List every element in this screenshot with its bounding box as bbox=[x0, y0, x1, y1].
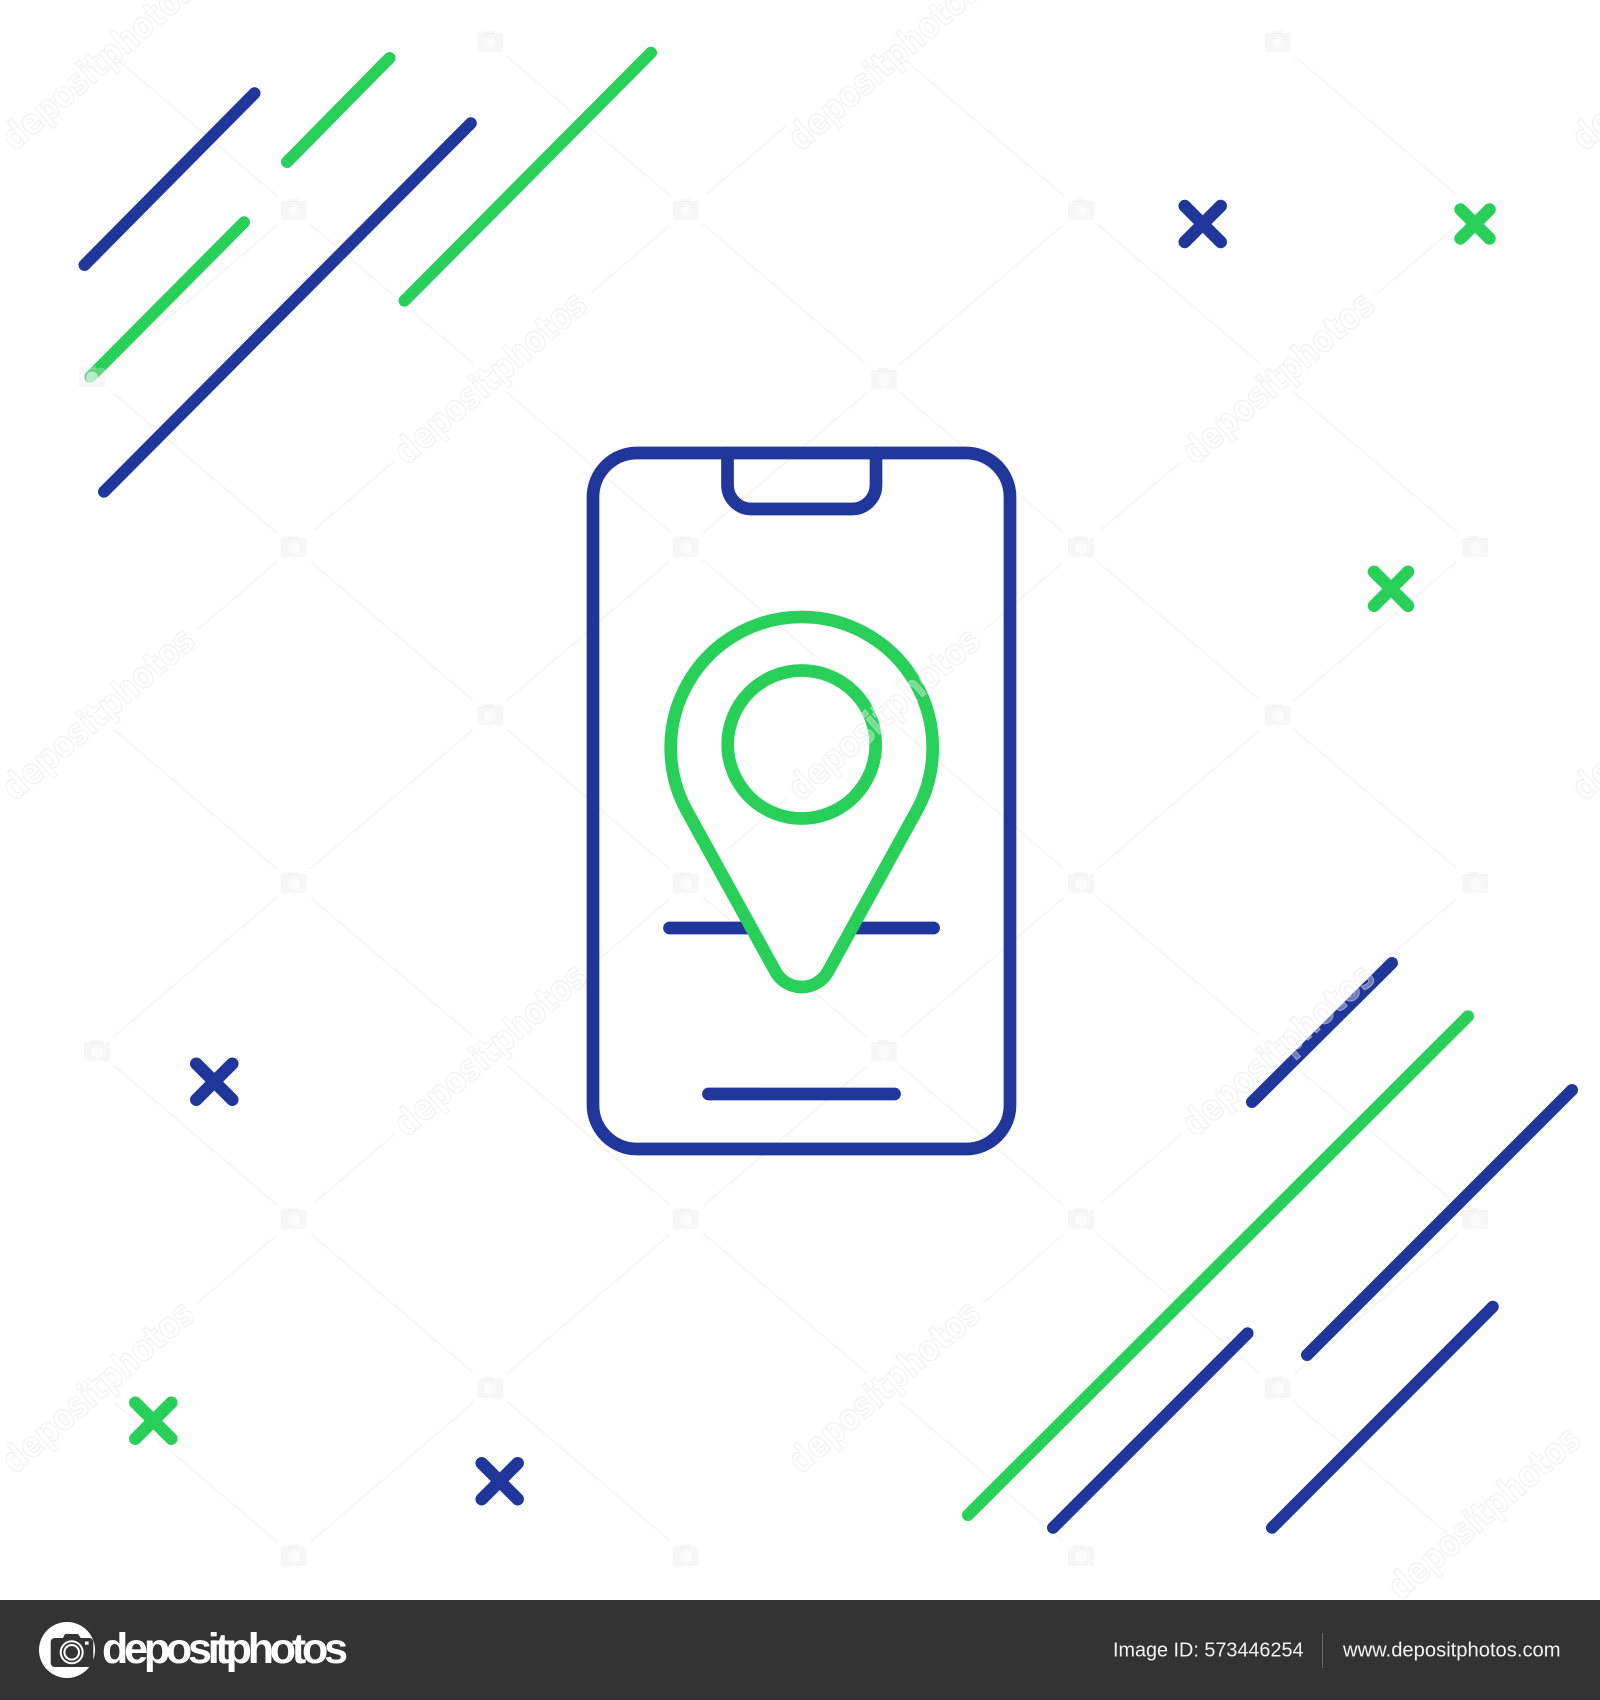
icon: smartphone with location pin bbox=[593, 453, 1010, 1149]
image id: Image ID: 573446254 bbox=[1113, 1640, 1304, 1662]
phone notch bbox=[728, 453, 876, 509]
faint watermark lattice lines bbox=[97, 42, 1475, 1556]
location pin inner circle bbox=[728, 670, 876, 818]
watermark text repeated: depositphotos bbox=[386, 284, 595, 473]
watermark text repeated: depositphotos bbox=[0, 620, 203, 809]
watermark text repeated: depositphotos bbox=[0, 1293, 203, 1482]
footer separator bbox=[1322, 1633, 1323, 1668]
icon: green cross right bbox=[1374, 572, 1408, 606]
logo wordmark: depositphotos bbox=[102, 1625, 348, 1673]
watermark text repeated: depositphotos bbox=[386, 956, 595, 1145]
watermark text repeated: depositphotos bbox=[780, 1293, 989, 1482]
decorative diagonal lines: bottom right bbox=[968, 963, 1572, 1528]
icon: blue cross bottom bbox=[482, 1463, 518, 1499]
decorative diagonal lines: top left bbox=[84, 53, 651, 492]
watermark text repeated: depositphotos bbox=[1174, 284, 1383, 473]
website url: www.depositphotos.com bbox=[1342, 1640, 1561, 1662]
icon: green cross top right bbox=[1460, 210, 1490, 238]
icon: blue cross left bbox=[196, 1064, 232, 1100]
icon: depositphotos camera logo bbox=[39, 1622, 95, 1678]
icon: green cross bottom left bbox=[135, 1403, 171, 1439]
icon: blue cross top right bbox=[1185, 206, 1221, 242]
watermark text repeated: depositphotos bbox=[1174, 956, 1383, 1145]
home bar bbox=[708, 1088, 894, 1100]
footer bar bbox=[0, 1600, 1600, 1700]
watermark text repeated: depositphotos bbox=[780, 620, 989, 809]
location pin outline bbox=[671, 617, 933, 987]
ground line behind pin bbox=[670, 922, 934, 934]
watermark camera marks bbox=[79, 31, 1488, 1566]
phone body bbox=[593, 453, 1010, 1149]
